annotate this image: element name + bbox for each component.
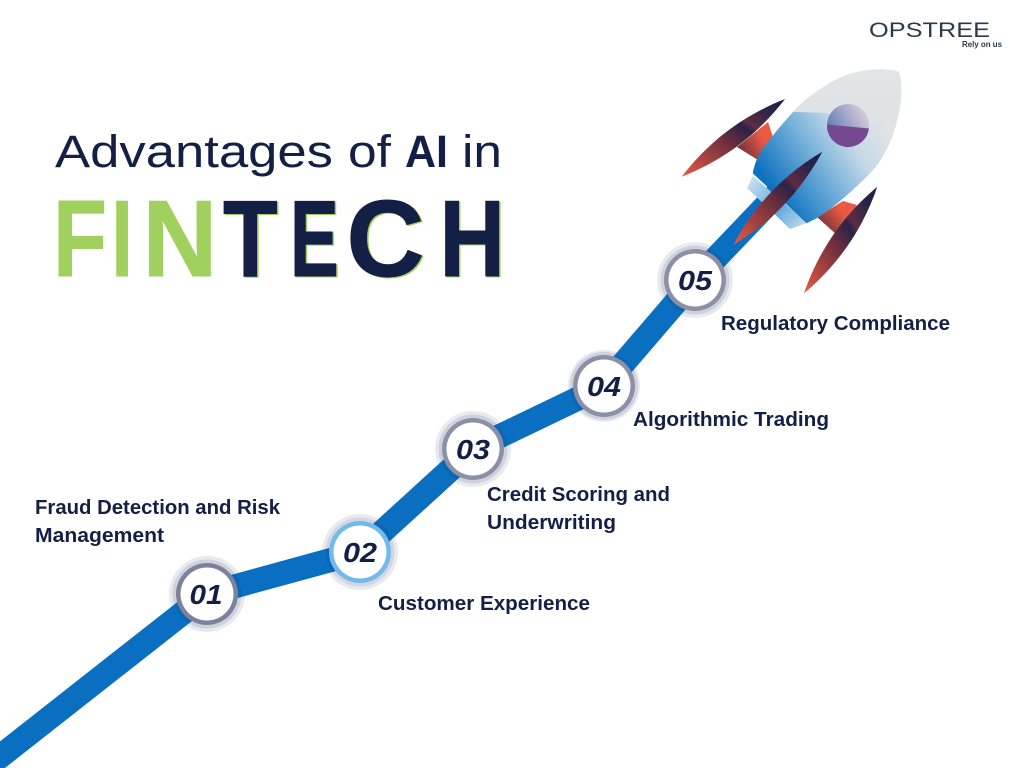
label: Customer Experience: Customer Experience xyxy=(378,593,590,615)
rocket center fin xyxy=(733,152,822,245)
rocket right strut xyxy=(817,201,857,235)
marker halos behind the path xyxy=(169,242,733,632)
step 03 marker: 03 xyxy=(456,434,490,465)
rocket nozzle xyxy=(747,176,807,229)
TECH in navy: C xyxy=(346,178,424,299)
TECH in navy xyxy=(223,177,505,300)
TECH green offset shadow: C xyxy=(348,178,426,300)
step 01 marker: 01 xyxy=(190,579,222,610)
FIN in green: I xyxy=(112,178,133,299)
label: Credit Scoring and Underwriting: Underwriting xyxy=(487,512,616,534)
TECH in navy: E xyxy=(290,177,339,299)
TECH green offset shadow: H xyxy=(441,179,506,301)
logo: Opstree xyxy=(869,19,1003,49)
rocket window xyxy=(827,104,869,147)
step 02 marker: 02 xyxy=(343,537,377,568)
TECH green offset shadow: E xyxy=(292,178,340,300)
growth path line xyxy=(0,170,800,766)
logo: Opstree: OPSTREE xyxy=(869,19,990,42)
TECH in navy: H xyxy=(440,178,505,300)
rocket right fin xyxy=(804,187,877,293)
title line: Advantages of AI in: AI xyxy=(405,126,448,177)
rocket left strut xyxy=(737,122,773,160)
title line: Advantages of AI in: Advantages xyxy=(55,126,333,177)
rocket left fin xyxy=(682,99,785,177)
label: Fraud Detection and Risk Management: Management xyxy=(35,525,164,547)
step 02 marker xyxy=(326,518,394,586)
title line: Advantages of AI in: in xyxy=(462,126,502,177)
logo: Opstree: Rely on us xyxy=(962,40,1003,49)
label: Fraud Detection and Risk Management: Fraud Detection and Risk xyxy=(35,497,281,519)
label: Regulatory Compliance: Regulatory Compliance xyxy=(721,313,950,335)
step 05 marker xyxy=(660,246,730,314)
heading: FINTECH xyxy=(53,177,506,301)
label: Algorithmic Trading: Algorithmic Trading xyxy=(633,409,829,431)
label: Credit Scoring and Underwriting: Credit Scoring and xyxy=(487,484,670,506)
step 04 marker: 04 xyxy=(587,371,621,402)
step 04 marker xyxy=(570,352,638,420)
step 03 marker xyxy=(438,414,508,484)
step 05 marker: 05 xyxy=(678,265,712,296)
FIN in green: F xyxy=(53,178,107,300)
title line: Advantages of AI in: of xyxy=(348,126,392,177)
FIN in green: N xyxy=(142,178,217,300)
icon: rocket xyxy=(682,60,906,293)
rocket body xyxy=(753,60,906,223)
TECH in navy: T xyxy=(223,179,278,300)
TECH green offset shadow: T xyxy=(224,179,279,301)
TECH green offset shadow xyxy=(224,178,506,301)
FIN in green xyxy=(53,178,217,300)
title line: Advantages of AI in xyxy=(55,126,502,177)
step 01 marker xyxy=(172,560,242,628)
